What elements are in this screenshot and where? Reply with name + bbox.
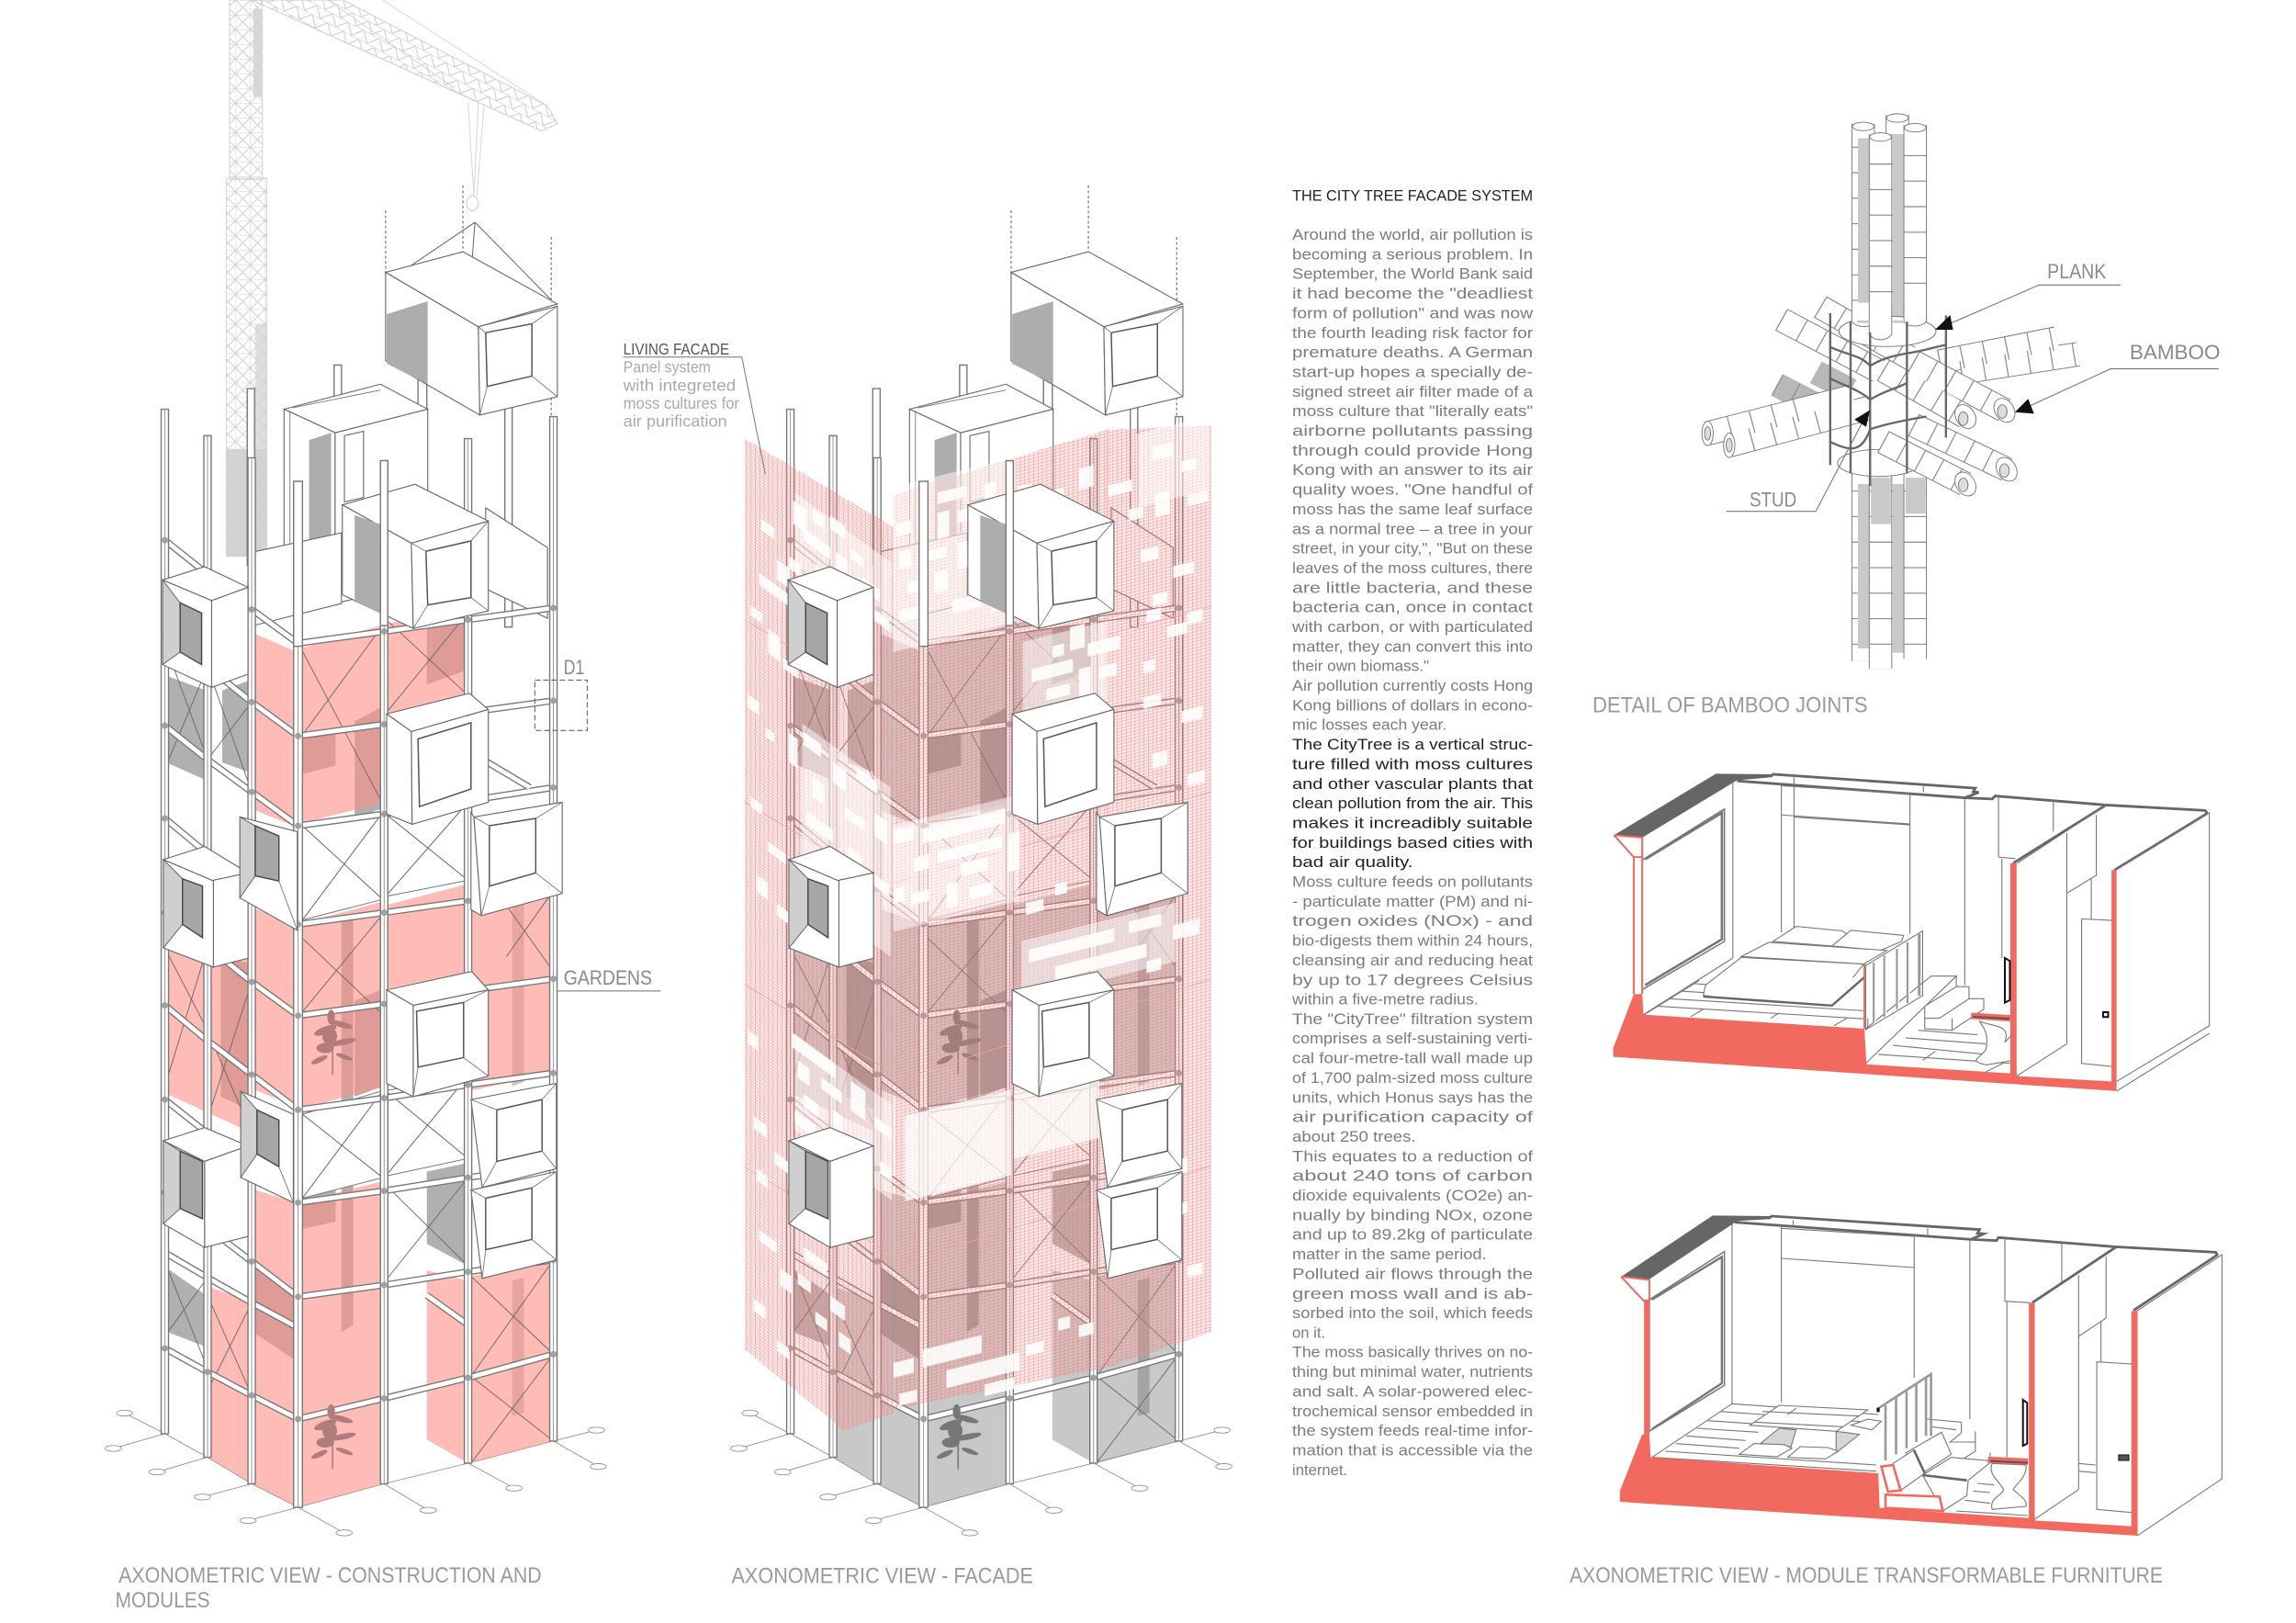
label: living facade: LIVING FACADE — [624, 340, 729, 358]
red section cut — [1613, 835, 2117, 1091]
paragraph: air pollution: their own biomass." — [1292, 658, 1429, 675]
paragraph: costs: Kong billions of dollars in econo- — [1292, 696, 1533, 714]
label: living facade: with integreted — [623, 376, 736, 394]
floor planks — [1644, 976, 2010, 1072]
paragraph: sensor: the system feeds real-time infor- — [1292, 1422, 1533, 1439]
caption: construction and modules: MODULES — [116, 1588, 210, 1613]
paragraph: filtration system: comprises a self-sustaining verti- — [1292, 1030, 1533, 1047]
label: plank — [1935, 260, 2121, 330]
paragraph: moss culture: by up to 17 degrees Celsius — [1292, 971, 1533, 988]
paragraph: sensor — [1292, 1344, 1533, 1479]
paragraph: highlighted summary: and other vascular plants that — [1292, 775, 1533, 793]
paragraph: moss culture: - particulate matter (PM) and ni- — [1292, 893, 1533, 910]
paragraph: carbon reduction: and up to 89.2kg of particulate — [1292, 1226, 1533, 1244]
grey translucent panels — [792, 606, 1179, 1507]
paragraph: costs — [1292, 677, 1533, 734]
bamboo tree — [310, 1009, 356, 1075]
paragraph: air pollution — [1291, 226, 1534, 675]
soft moss-free zones — [794, 409, 1210, 1201]
dark tree — [936, 1009, 982, 1075]
paragraph: moss culture: Moss culture feeds on pollutants — [1292, 873, 1533, 891]
paragraph: moss culture: bio-digests them within 24 hours, — [1292, 931, 1533, 949]
stairs — [1925, 976, 1984, 1031]
paragraph: air pollution: quality woes. "One handful of — [1292, 481, 1533, 499]
paragraph: highlighted summary: clean pollution from the air. This — [1292, 795, 1533, 812]
paragraph: air pollution: bacteria can, once in contact — [1292, 599, 1533, 616]
axonometric view: facade — [731, 186, 1232, 1536]
paragraph: sensor: thing but minimal water, nutrients — [1292, 1363, 1533, 1381]
paragraph: air pollution: form of pollution" and was now — [1292, 304, 1534, 321]
caption: construction and modules: AXONOMETRIC VIEW - CONSTRUCTION AND — [118, 1563, 542, 1588]
paragraph: air pollution: moss culture that "literally eats" — [1292, 402, 1533, 420]
moss culture gaps, front and right faces — [894, 425, 1209, 1419]
paragraph: moss culture: trogen oxides (NOx) - and — [1292, 912, 1533, 930]
paragraph: air flow: on it. — [1292, 1324, 1325, 1341]
paragraph: filtration system: air purification capacity of — [1292, 1109, 1533, 1126]
paragraph: air pollution: leaves of the moss cultures, there — [1292, 559, 1533, 577]
paragraph: moss culture: cleansing air and reducing heat — [1292, 952, 1533, 969]
paragraph: air pollution: as a normal tree – a tree in your — [1292, 520, 1533, 537]
roof cut — [1621, 1215, 1771, 1279]
rail — [1876, 1374, 1931, 1460]
low table — [1750, 1405, 1868, 1453]
paragraph: highlighted summary: bad air quality. — [1292, 853, 1412, 871]
paragraph: carbon reduction: dioxide equivalents (CO2e) an- — [1292, 1187, 1533, 1204]
paragraph: carbon reduction: matter in the same period. — [1292, 1245, 1487, 1263]
paragraph: air flow: green moss wall and is ab- — [1292, 1285, 1533, 1302]
paragraph: sensor: mation that is accessible via the — [1292, 1441, 1533, 1459]
paragraph: air pollution: becoming a serious problem. In — [1292, 245, 1533, 263]
tower crane — [226, 0, 557, 557]
label: D1 detail marker: D1 — [564, 656, 584, 679]
paragraph: filtration system: cal four-metre-tall wall made up — [1292, 1050, 1533, 1067]
paragraph: sensor: The moss basically thrives on no- — [1292, 1344, 1533, 1361]
label: stud — [1726, 410, 1870, 512]
paragraph: air pollution: are little bacteria, and these — [1292, 579, 1533, 596]
paragraph: air pollution: the fourth leading risk factor for — [1292, 324, 1533, 342]
paragraph: air flow: Polluted air flows through the — [1292, 1265, 1533, 1282]
paragraph: carbon reduction: This equates to a reduction of — [1292, 1147, 1533, 1165]
paragraph: air pollution: start-up hopes a specially de- — [1292, 363, 1533, 380]
paragraph: air pollution: airborne pollutants passing — [1292, 423, 1533, 440]
paragraph: air flow: sorbed into the soil, which feeds — [1292, 1304, 1533, 1322]
caption: bamboo joints: DETAIL OF BAMBOO JOINTS — [1593, 693, 1868, 718]
caption: transformable furniture: AXONOMETRIC VIEW - MODULE TRANSFORMABLE FURNITURE — [1570, 1563, 2163, 1588]
window — [1649, 1252, 1725, 1431]
label: living facade — [623, 340, 765, 474]
paragraph: moss culture: within a five-metre radius. — [1291, 991, 1479, 1009]
paragraph: air pollution: matter, they can convert this into — [1292, 637, 1533, 655]
paragraph: filtration system: of 1,700 palm-sized moss culture — [1292, 1069, 1533, 1087]
paragraph: air pollution: Kong with an answer to its air — [1292, 461, 1533, 479]
walls — [1643, 777, 2210, 1091]
paragraph: highlighted summary: The CityTree is a vertical struc- — [1292, 736, 1533, 753]
axonometric view: construction and modules — [106, 186, 606, 1536]
label: plank: PLANK — [2047, 260, 2106, 283]
floor cushions — [1739, 1419, 1881, 1459]
floor planks — [1653, 1403, 2096, 1516]
text column: the city tree facade system — [1291, 186, 1534, 1479]
paragraph: filtration system: about 250 trees. — [1292, 1128, 1416, 1145]
module section: bedroom layout — [1613, 773, 2210, 1091]
paragraph: highlighted summary: for buildings based cities with — [1292, 834, 1533, 851]
label: living facade: Panel system — [624, 357, 711, 376]
paragraph: air pollution: it had become the "deadliest — [1292, 285, 1533, 302]
paragraph: highlighted summary: makes it increadibly suitable — [1292, 814, 1533, 831]
door pull and handle — [2023, 1400, 2129, 1460]
paragraph: air pollution: premature deaths. A German — [1292, 344, 1533, 361]
paragraph: sensor: and salt. A solar-powered elec- — [1292, 1383, 1533, 1401]
paragraph: carbon reduction: about 240 tons of carbon — [1292, 1167, 1533, 1185]
paragraph: carbon reduction: nually by binding NOx, ozone — [1292, 1206, 1533, 1223]
caption: facade: AXONOMETRIC VIEW - FACADE — [731, 1564, 1033, 1589]
label: living facade: air purification — [624, 412, 727, 431]
paragraph: air pollution: signed street air filter made of a — [1292, 383, 1534, 400]
moss culture gaps, left face — [748, 456, 892, 1435]
paragraph: air flow — [1292, 1265, 1533, 1341]
paragraph: filtration system: units, which Honus says has the — [1292, 1088, 1533, 1106]
label: bamboo — [2015, 341, 2220, 413]
label: bamboo: BAMBOO — [2130, 341, 2220, 364]
paragraph: sensor: trochemical sensor embedded in — [1292, 1403, 1533, 1420]
residential modules — [163, 461, 562, 1279]
stairs — [1950, 1422, 1990, 1460]
paragraph: filtration system: The "CityTree" filtration system — [1292, 1010, 1533, 1028]
paragraph: air pollution: through could provide Hong — [1292, 442, 1533, 459]
paragraph: highlighted summary — [1292, 736, 1533, 871]
rail — [1865, 930, 1922, 1030]
paragraph: air pollution: moss has the same leaf surface — [1292, 501, 1533, 518]
module section: living layout — [1620, 1215, 2222, 1536]
window — [1642, 809, 1725, 989]
paragraph: highlighted summary: ture filled with moss cultures — [1292, 755, 1533, 772]
red section cut — [1620, 1277, 2138, 1536]
label: gardens: GARDENS — [564, 966, 652, 989]
detail drawing: bamboo joint — [1702, 114, 2078, 669]
caption: construction and modules — [116, 1563, 542, 1613]
paragraph: carbon reduction — [1292, 1147, 1533, 1263]
door pull and handle — [2005, 958, 2108, 1017]
paragraph: filtration system — [1292, 1010, 1533, 1145]
paragraph: air pollution: with carbon, or with particulated — [1291, 618, 1533, 636]
paragraph: air pollution: September, the World Bank said — [1292, 265, 1533, 283]
label: living facade: moss cultures for — [624, 394, 739, 412]
pink garden panels — [166, 606, 554, 1507]
paragraph: moss culture — [1291, 873, 1533, 1009]
paragraph: costs: Air pollution currently costs Hong — [1292, 677, 1533, 694]
walls — [1652, 1220, 2222, 1536]
stool — [1991, 1463, 2026, 1509]
roof cut — [1614, 773, 1773, 838]
label: stud: STUD — [1750, 488, 1796, 511]
bed — [1704, 927, 1904, 1006]
paragraph: sensor: internet. — [1292, 1461, 1347, 1479]
modules in front of the facade — [788, 461, 1187, 1279]
paragraph: air pollution: street, in your city,", "But on these — [1292, 540, 1533, 558]
label: D1 detail marker — [535, 656, 587, 730]
paragraph: costs: mic losses each year. — [1292, 716, 1446, 734]
paragraph: air pollution: Around the world, air pollution is — [1292, 226, 1533, 243]
column heading: THE CITY TREE FACADE SYSTEM — [1292, 186, 1533, 204]
sofa — [1881, 1432, 1992, 1511]
living facade: moss panels — [745, 409, 1211, 1435]
rug — [1976, 1021, 2013, 1065]
